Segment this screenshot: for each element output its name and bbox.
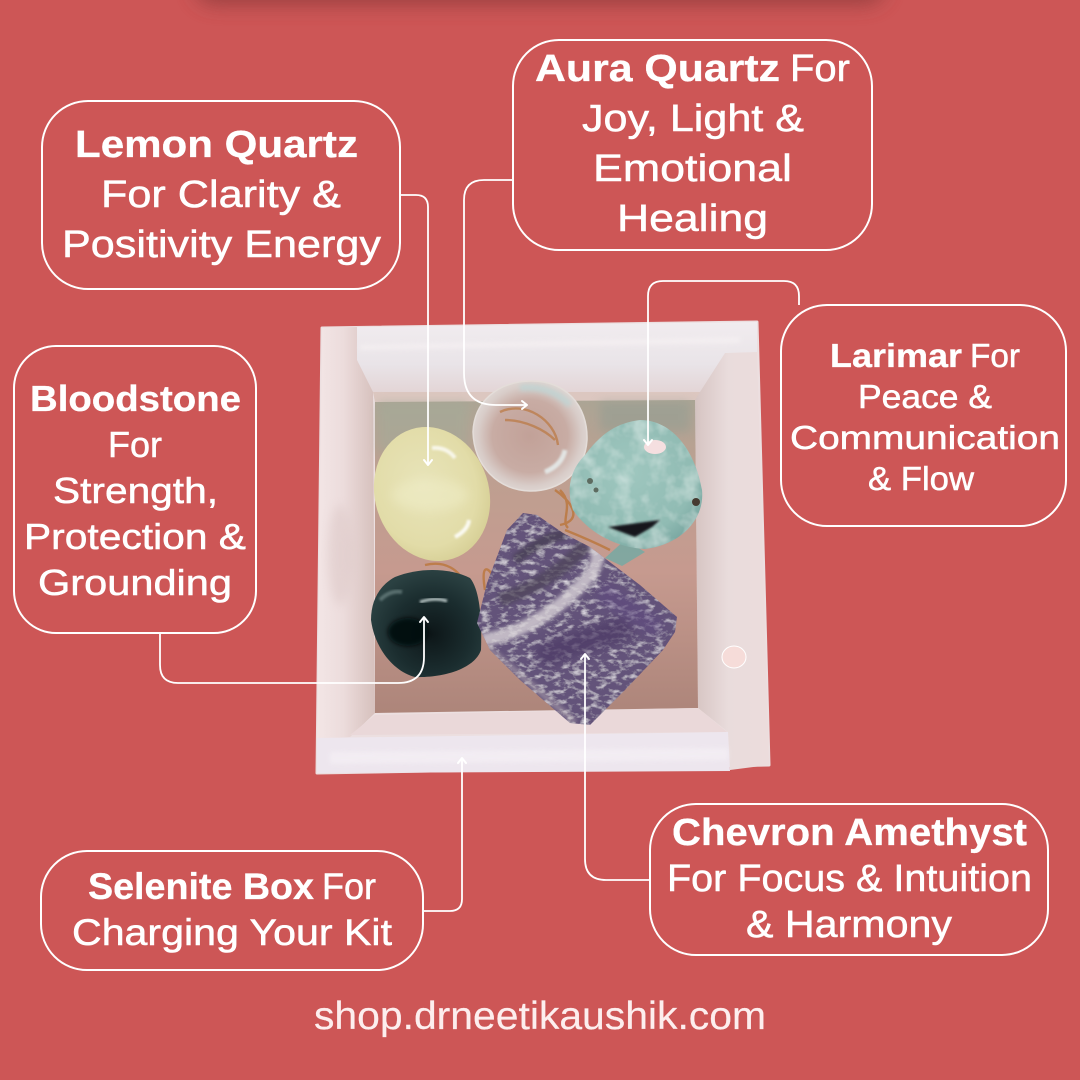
callout: chevron amethyst (650, 804, 1048, 955)
selenite box (317, 322, 769, 773)
callout: chevron amethyst: For Focus & Intuition (667, 858, 1032, 900)
callout: chevron amethyst: Chevron Amethyst (672, 812, 1027, 854)
callout: bloodstone: Bloodstone (30, 378, 241, 419)
orange threads and teal piece (425, 490, 645, 590)
callout: selenite box: Charging Your Kit (72, 912, 393, 953)
callout: aura quartz: Aura Quartz (535, 48, 780, 90)
callout: larimar: Communication (790, 419, 1060, 456)
connector: chevron amethyst (581, 654, 650, 880)
website url: shop.drneetikaushik.com (314, 995, 766, 1038)
connector: larimar (644, 281, 799, 445)
stone: aura quartz (473, 381, 587, 491)
callout: lemon quartz: Positivity Energy (62, 224, 381, 266)
connector: lemon quartz (400, 195, 432, 465)
callout: larimar (781, 305, 1066, 526)
callout: lemon quartz: For Clarity & (101, 174, 341, 216)
stone: larimar (570, 420, 702, 549)
top shadow band (195, 0, 885, 4)
callout: selenite box (41, 851, 423, 970)
callout: aura quartz: Emotional (593, 148, 792, 190)
stone: bloodstone (371, 570, 481, 677)
callout: lemon quartz: Lemon Quartz (75, 124, 358, 166)
callout: larimar: For (970, 337, 1020, 374)
callout: bloodstone: Strength, (53, 470, 218, 511)
callout: larimar: Peace & (858, 378, 992, 415)
callout: aura quartz: For (790, 48, 850, 90)
callout: bloodstone: Protection & (24, 516, 246, 557)
stone: chevron amethyst (477, 513, 677, 725)
connector: selenite box (423, 758, 466, 911)
callout: aura quartz (513, 40, 872, 250)
callout: larimar: & Flow (868, 460, 974, 497)
callout: bloodstone (14, 346, 256, 633)
photo: selenite box with crystals (317, 322, 769, 773)
connector: aura quartz (464, 180, 527, 409)
callout: selenite box: Selenite Box (88, 866, 314, 907)
callout: larimar: Larimar (830, 337, 962, 374)
callout: bloodstone: For (108, 424, 162, 465)
callout: aura quartz: Healing (617, 198, 768, 240)
callout: bloodstone: Grounding (38, 562, 232, 603)
callout: aura quartz: Joy, Light & (582, 98, 804, 140)
callout: chevron amethyst: & Harmony (746, 904, 952, 946)
callout: selenite box: For (322, 866, 376, 907)
petal (722, 646, 746, 668)
connector: bloodstone (160, 617, 428, 683)
callout: lemon quartz (42, 101, 400, 289)
stone: lemon quartz (357, 412, 507, 576)
